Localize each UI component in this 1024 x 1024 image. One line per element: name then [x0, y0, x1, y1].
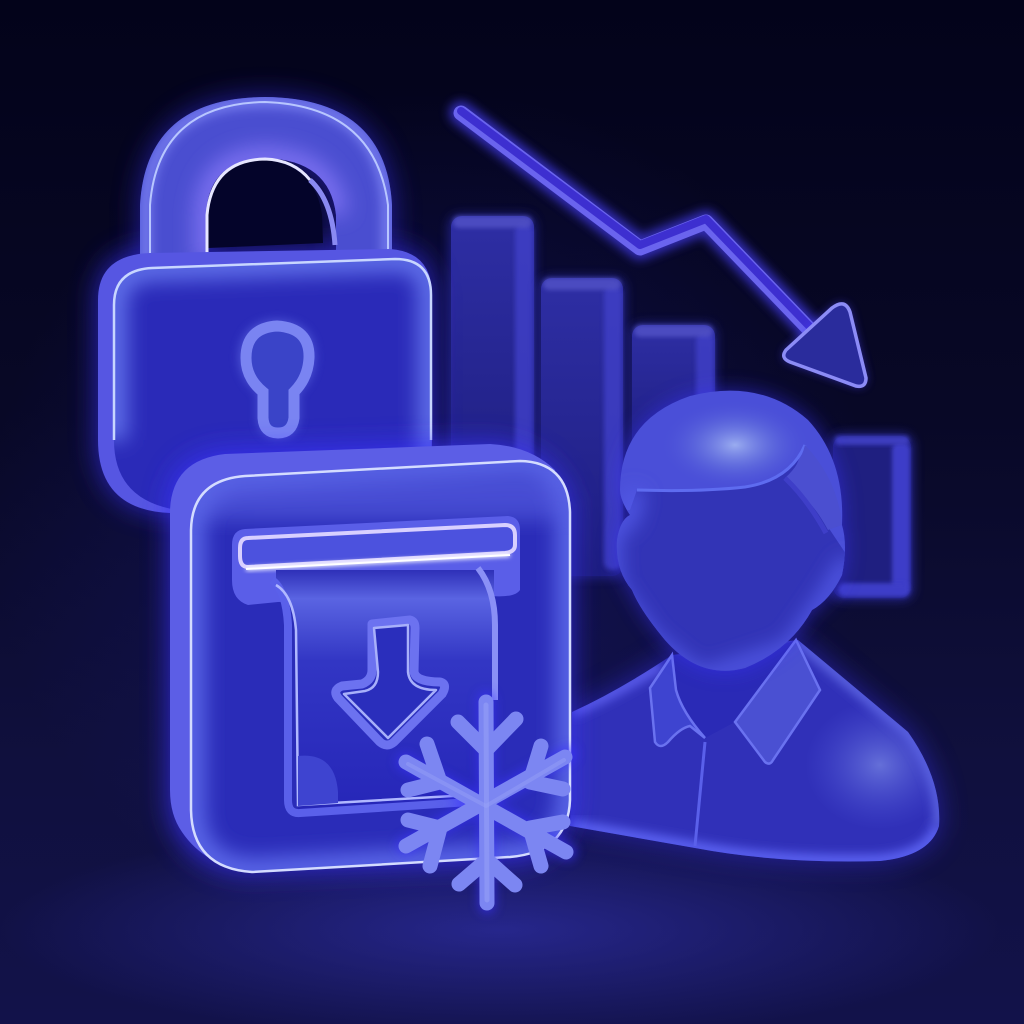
left-upper branch	[408, 744, 440, 790]
shackle opening	[208, 160, 323, 248]
bar 4	[830, 433, 914, 601]
download arrow	[336, 620, 445, 745]
right collar	[735, 640, 820, 764]
trend arrow	[461, 111, 866, 386]
receipt paper	[272, 568, 495, 813]
head	[610, 391, 850, 680]
person	[570, 391, 955, 861]
lock glow	[98, 248, 432, 512]
hair side	[785, 445, 842, 530]
axes	[486, 702, 487, 903]
bar 2	[538, 276, 626, 578]
lock body	[98, 249, 432, 513]
bar chart	[448, 214, 914, 601]
torso	[570, 640, 955, 861]
slot	[232, 516, 520, 605]
bar 3	[630, 323, 717, 460]
right-lower branch	[530, 822, 563, 866]
face	[618, 459, 844, 668]
keyhole	[239, 320, 315, 438]
snowflake	[405, 700, 568, 905]
top branch	[458, 719, 516, 750]
shackle	[140, 97, 392, 270]
ATM card	[170, 444, 570, 872]
right-upper branch	[530, 746, 563, 789]
padlock	[98, 97, 432, 513]
neck	[674, 640, 796, 738]
card face	[191, 461, 570, 872]
card side	[170, 444, 560, 872]
shirt placket	[695, 742, 705, 846]
left-lower branch	[408, 820, 440, 866]
bar 1	[448, 214, 536, 514]
bottom branch	[459, 860, 515, 885]
hair highlight	[660, 400, 810, 490]
left collar	[650, 655, 705, 746]
receipt curl	[298, 756, 338, 806]
